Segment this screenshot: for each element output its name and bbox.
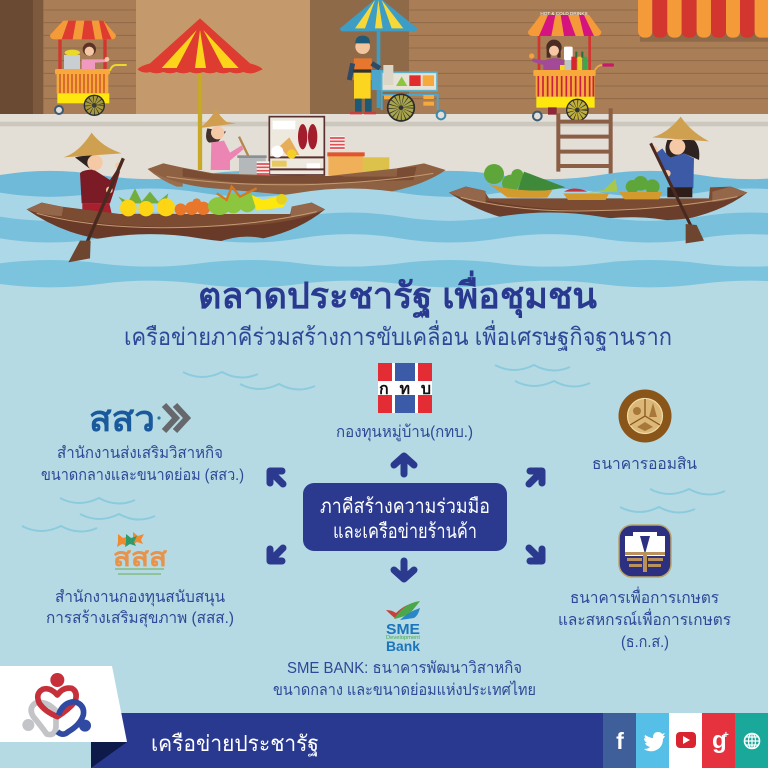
center box: และเครือข่ายร้านค้า xyxy=(333,521,477,543)
social icons xyxy=(603,713,768,768)
water wave two xyxy=(0,188,768,300)
logo: SME bank: Bank xyxy=(386,638,420,654)
canal walkway xyxy=(0,114,768,184)
label: BAAC: ธนาคารเพื่อการเกษตร xyxy=(570,586,719,607)
left paddle xyxy=(68,158,123,262)
water wave one xyxy=(0,171,768,300)
label: ThaiHealth xyxy=(46,589,234,628)
logo: SME bank: Development xyxy=(386,635,421,641)
water wave five xyxy=(0,260,768,300)
label: SME bank: SME BANK: ธนาคารพัฒนาวิสาหกิจ xyxy=(287,660,522,677)
label: SME bank xyxy=(273,660,536,699)
teal umbrella cart vendor xyxy=(340,0,445,121)
label: BAAC: และสหกรณ์เพื่อการเกษตร xyxy=(558,608,731,629)
label: ThaiHealth: สำนักงานกองทุนสนับสนุน xyxy=(55,589,225,607)
center box xyxy=(303,483,507,551)
logo: village fund: กทบ xyxy=(379,381,431,398)
logo: BAAC xyxy=(619,525,671,577)
water wave three xyxy=(0,212,768,300)
right boat vendor xyxy=(449,117,747,222)
ladder xyxy=(558,108,611,174)
label: village fund: กองทุนหมู่บ้าน(กทบ.) xyxy=(336,423,473,442)
google plus button: g xyxy=(712,727,727,754)
logo: SME bank xyxy=(386,601,421,654)
drinks cart: HOT & COLD DRINKS xyxy=(540,11,588,16)
logo: savings bank xyxy=(618,390,672,442)
middle boat vendor xyxy=(137,18,446,198)
label: ThaiHealth: การสร้างเสริมสุขภาพ (สสส.) xyxy=(46,609,234,628)
left boat vendor xyxy=(27,133,325,243)
arrow up left xyxy=(270,471,283,484)
wooden wall background xyxy=(0,0,768,115)
label: BAAC: (ธ.ก.ส.) xyxy=(621,634,669,651)
food cart left xyxy=(50,21,127,115)
website button xyxy=(735,713,768,768)
arrow down left xyxy=(270,548,283,561)
label: SME bank: ขนาดกลาง และขนาดย่อมแห่งประเทศไทย xyxy=(273,680,536,699)
center box: ภาคีสร้างความร่วมมือ xyxy=(320,496,490,518)
title: ตลาดประชารัฐ เพื่อชุมชน xyxy=(198,270,597,319)
label: OSMEP: สำนักงานส่งเสริมวิสาหกิจ xyxy=(57,445,223,462)
big striped awning xyxy=(638,0,768,42)
label: BAAC xyxy=(558,586,731,651)
logo: OSMEP: สสว xyxy=(89,398,155,439)
twitter button xyxy=(636,713,669,768)
market scene illustration xyxy=(0,0,768,300)
google plus button: + xyxy=(723,730,729,741)
fruit pile xyxy=(118,187,287,216)
logo: ThaiHealth xyxy=(113,532,167,575)
label: OSMEP xyxy=(41,445,244,484)
google plus button xyxy=(702,713,735,768)
right paddle xyxy=(651,143,704,243)
youtube button xyxy=(669,713,702,768)
label: OSMEP: ขนาดกลางและขนาดย่อม (สสว.) xyxy=(41,467,244,484)
logo flag xyxy=(0,666,127,742)
arrow down xyxy=(394,561,414,579)
logo: ThaiHealth: สสส xyxy=(113,542,167,572)
label: savings bank: ธนาคารออมสิน xyxy=(592,456,697,473)
facebook button xyxy=(603,713,636,768)
subtitle: เครือข่ายภาคีร่วมสร้างการขับเคลื่อน เพื่อเศรษฐกิจฐานราก xyxy=(124,320,672,351)
arrow up xyxy=(394,456,414,474)
logo: SME bank: SME xyxy=(386,621,420,638)
water wave six xyxy=(0,281,768,300)
logo: OSMEP xyxy=(89,398,187,439)
water wave four xyxy=(0,234,768,300)
arrow up right xyxy=(529,471,542,484)
arrow down right xyxy=(529,548,542,561)
drinks cart xyxy=(528,11,614,174)
facebook button: f xyxy=(616,728,624,754)
footer bar xyxy=(91,713,603,768)
vegetable baskets xyxy=(484,164,662,200)
footer bar: เครือข่ายประชารัฐ xyxy=(151,731,319,757)
logo: village fund xyxy=(378,363,432,413)
